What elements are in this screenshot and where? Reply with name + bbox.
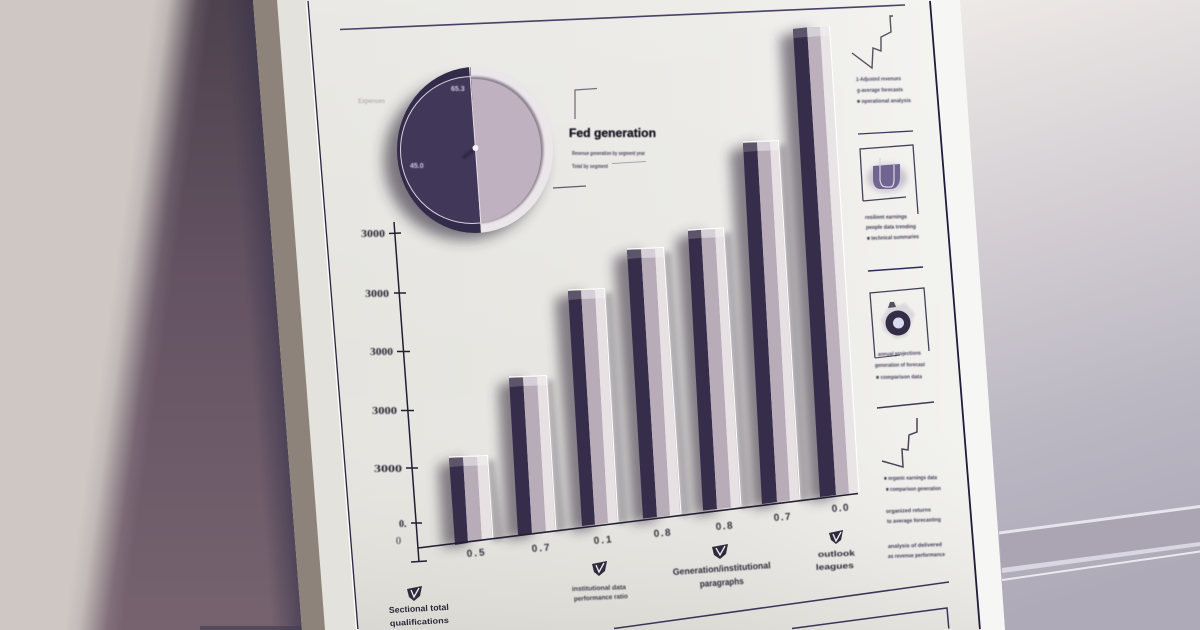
text block: trend top: g-average forecasts: [857, 87, 903, 94]
y axis labels: 3000: [372, 406, 397, 417]
category: second: [572, 561, 628, 603]
pie dark half: [397, 67, 481, 233]
top rule: [340, 5, 905, 30]
text block: trend bottom: as revenue performance: [888, 552, 945, 560]
x axis labels: [466, 502, 851, 560]
x axis: [418, 494, 858, 548]
x axis labels: 0.7: [773, 511, 793, 524]
icon box: disc: [870, 288, 929, 358]
y axis labels: 0: [396, 536, 401, 547]
text block: trend top: 1-Adjusted revenues: [856, 76, 901, 83]
text block: cup: ■ technical summaries: [867, 234, 919, 242]
y axis labels: 3000: [370, 347, 393, 358]
bar 6: [743, 140, 800, 504]
board: [253, 0, 1005, 630]
category label: qualifications: [390, 616, 450, 628]
bar 1: [449, 456, 493, 545]
icon: badge: [829, 530, 843, 544]
legend heading: Fed generation: [569, 126, 656, 140]
x axis labels: 0.5: [466, 547, 487, 560]
board light side: [253, 0, 1005, 630]
text block: trend top: ■ operational analysis: [857, 98, 911, 105]
category: third: [672, 544, 771, 589]
rule three: [877, 402, 934, 408]
icon: trend line top: [852, 16, 893, 68]
right wall: [950, 0, 1200, 630]
category label: [572, 584, 628, 603]
legend line two: Total by segment: [572, 164, 608, 170]
text block: cup: resilient earnings: [865, 214, 907, 221]
text block: pie legend: [553, 88, 656, 188]
bar 7: [793, 26, 859, 497]
x axis labels: 0.7: [531, 542, 552, 555]
category label: [672, 560, 771, 589]
text block: disc: annual projections: [878, 351, 921, 358]
board right strip: [930, 0, 1005, 630]
left inner highlight: [306, 1, 356, 629]
text block: trend bottom: organized returns: [886, 507, 931, 515]
board face: [308, 0, 980, 630]
category label: paragraphs: [699, 576, 744, 589]
right column: [852, 16, 945, 560]
left wall: [0, 0, 320, 630]
icon: badge: [712, 544, 728, 559]
bar chart: [361, 26, 859, 562]
y axis labels: 3000: [365, 289, 389, 300]
text block: trend bottom: ■ comparison generation: [886, 486, 942, 493]
pie label upper: 65.3: [451, 86, 465, 93]
skirting board: [999, 505, 1200, 581]
category label: [816, 549, 856, 572]
x axis labels: 0.8: [715, 520, 735, 533]
category label: institutional data: [572, 584, 626, 593]
lower rule: [553, 186, 586, 188]
pie label lower: 45.0: [410, 163, 424, 170]
bar shadows: [438, 28, 835, 548]
bar 4: [627, 248, 681, 518]
pie divider: [470, 67, 482, 232]
text block: cup: [865, 214, 919, 242]
legend rule: [612, 162, 646, 164]
y axis labels: 3000: [361, 229, 385, 240]
category: fourth: [816, 530, 856, 572]
y axis labels: 0.: [399, 519, 407, 530]
icon: badge: [407, 586, 422, 601]
y axis labels: 3000: [374, 464, 402, 475]
board shadow on the left wall: [74, 0, 302, 630]
category: first: [389, 586, 450, 628]
category label: leagues: [816, 561, 855, 572]
board face shading: [308, 0, 980, 630]
text block: disc: generation of forecast: [875, 362, 925, 369]
bottom panel outline: [792, 608, 949, 628]
x axis labels: 0.0: [831, 502, 851, 515]
bracket: [575, 88, 597, 119]
pie shadow: [384, 80, 544, 240]
pie hub: [472, 145, 478, 151]
rule one: [858, 131, 913, 134]
floor strip: [200, 626, 310, 630]
pie light half: [470, 67, 553, 233]
x axis labels: 0.1: [593, 534, 614, 547]
bar 3: [568, 288, 618, 526]
small pie caption: Expenses: [358, 99, 385, 105]
category label: Sectional total: [389, 602, 449, 615]
board dark bevel: [253, 0, 325, 630]
hub shadow: [463, 150, 473, 158]
left inner border: [308, 1, 358, 629]
text block: trend bottom: to average forecasting: [887, 517, 941, 525]
bar right shadows: [487, 145, 808, 542]
text block: cup: people data trending: [866, 224, 916, 231]
rule two: [868, 267, 923, 271]
text block: trend bottom: [884, 475, 945, 560]
legend line one: Revenue generation by segment year: [572, 151, 646, 157]
text block: disc: [875, 351, 925, 381]
right inner border: [930, 1, 980, 629]
category label: outlook: [818, 549, 856, 559]
bottom rule: [614, 582, 949, 628]
bar 2: [509, 376, 556, 535]
text block: trend bottom: analysis of delivered: [888, 542, 942, 550]
y axis labels: [361, 229, 407, 547]
y axis: [389, 222, 427, 562]
text block: disc: ■ comparison data: [876, 374, 923, 381]
icon box: cup: [860, 145, 918, 214]
icon: badge: [592, 561, 607, 576]
category label: performance ratio: [574, 593, 628, 603]
text block: trend top: [856, 76, 911, 105]
text block: trend bottom: ■ organic earnings data: [884, 475, 938, 482]
category label: Generation/institutional: [672, 560, 771, 577]
icon: trend line bottom: [882, 418, 917, 467]
bar 5: [688, 228, 741, 510]
category label: [389, 602, 450, 628]
deep shadow next to board: [223, 0, 312, 630]
x axis labels: 0.8: [653, 527, 673, 540]
pie chart: [384, 67, 553, 240]
